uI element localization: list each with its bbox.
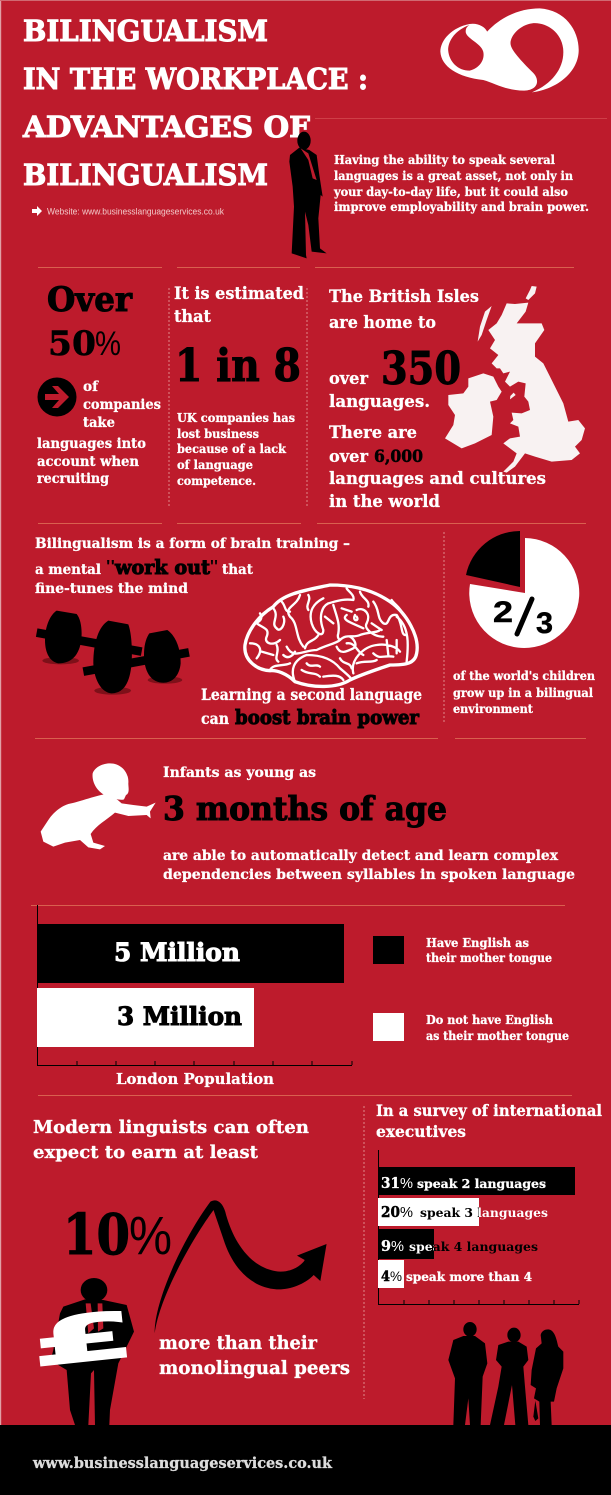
panel: brain training text: " — [106, 557, 115, 579]
chart: executives languages bars: speak 4 languages — [409, 1239, 538, 1254]
panel: British Isles text: languages and cultures — [329, 469, 546, 489]
brain power text: Learning a second language — [201, 685, 422, 704]
chart: executives languages bars: speak 3 languages — [420, 1205, 548, 1220]
panel: infants text: are able to automatically detect and learn complex — [163, 848, 559, 864]
chart: executives languages bars: % — [390, 1268, 402, 1284]
panel: infants text: 3 months of age — [163, 789, 447, 828]
panel: British Isles text: in the world — [329, 492, 440, 512]
panel: infants text: dependencies between syllables in spoken language — [163, 867, 575, 883]
brain power text: can — [201, 709, 229, 728]
title: BILINGUALISM — [23, 158, 268, 192]
children caption: of the world's children — [453, 669, 595, 683]
website link: Website: www.businesslanguageservices.co.uk — [47, 206, 224, 216]
chart: two thirds pie: 3 — [536, 607, 553, 640]
panel: over 50 percent: 50 — [48, 324, 96, 364]
chart: London population bars — [37, 905, 352, 1088]
panel: linguists earnings text: Modern linguists can often — [33, 1117, 309, 1138]
chart: executives languages bars: % — [400, 1204, 413, 1221]
panel: 1 in 8: of language — [177, 457, 253, 472]
chart: London population bars: London Population — [116, 1070, 274, 1088]
panel: 1 in 8: competence. — [177, 473, 256, 488]
title: BILINGUALISM — [23, 14, 268, 48]
title: ADVANTAGES OF — [22, 110, 310, 144]
chart: executives languages bars: speak more than 4 — [406, 1269, 532, 1284]
panel: over 50 percent: of — [83, 379, 99, 395]
panel: over 50 percent: Over — [47, 280, 133, 320]
chart: executives languages bars: 31 — [381, 1174, 400, 1192]
chart: London population bars: 3 Million — [117, 1002, 242, 1031]
more than text: more than their — [159, 1333, 317, 1354]
chart: executives languages bars — [378, 1150, 579, 1304]
icon: businessman silhouette — [289, 132, 327, 258]
legend — [373, 936, 569, 1043]
children caption: grow up in a bilingual — [453, 686, 593, 700]
panel: British Isles text: over — [329, 369, 369, 389]
children caption: environment — [453, 702, 533, 716]
panel: 1 in 8 — [174, 284, 304, 488]
icon: man holding pound sign: £ — [28, 1298, 138, 1381]
panel: over 50 percent: companies — [83, 397, 161, 413]
intro text: Having the ability to speak several — [334, 153, 555, 167]
icon: company logo swirl — [440, 8, 579, 92]
panel: 1 in 8: because of a lack — [177, 441, 286, 456]
title — [22, 14, 368, 192]
brain power text: boost brain power — [235, 705, 419, 729]
chart: executives languages bars: % — [391, 1238, 404, 1255]
panel: survey heading — [376, 1101, 602, 1141]
panel: British Isles text: The British Isles — [329, 287, 479, 307]
legend: Do not have English — [426, 1013, 553, 1027]
panel: over 50 percent — [37, 280, 161, 487]
chart: London population bars: 5 Million — [114, 938, 240, 967]
panel: 1 in 8: 1 in 8 — [175, 339, 301, 392]
chart: two thirds pie — [466, 531, 579, 648]
panel: over 50 percent: recruiting — [37, 471, 109, 487]
panel: survey heading: executives — [376, 1122, 466, 1141]
panel: linguists earnings text: expect to earn at least — [33, 1142, 259, 1163]
children caption — [453, 669, 595, 716]
more than text: monolingual peers — [159, 1358, 350, 1379]
panel: survey heading: In a survey of international — [376, 1101, 602, 1120]
panel: brain training text: that — [222, 562, 254, 578]
footer band — [0, 1425, 611, 1495]
chart: executives languages bars: 4 — [381, 1269, 390, 1285]
chart: executives languages bars: speak 2 languages — [417, 1176, 546, 1191]
legend: as their mother tongue — [426, 1029, 569, 1043]
panel: over 50 percent: % — [95, 325, 121, 363]
arrow: rising swoosh — [155, 1200, 327, 1333]
icon: brain — [245, 585, 417, 686]
panel: brain training text: work out — [114, 555, 211, 579]
panel: brain training text: Bilingualism is a form of brain training – — [35, 536, 350, 552]
panel: brain training text: " — [210, 557, 218, 579]
panel: British Isles text — [329, 287, 546, 512]
icon: man holding pound sign — [28, 1278, 138, 1425]
panel: over 50 percent: take — [83, 415, 115, 431]
intro text: your day-to-day life, but it could also — [333, 185, 568, 199]
chart: executives languages bars: 9 — [381, 1237, 391, 1255]
panel: British Isles text: languages. — [329, 392, 430, 412]
panel: British Isles text: over — [329, 447, 369, 467]
more than text — [159, 1333, 350, 1379]
intro text: improve employability and brain power. — [334, 200, 589, 214]
panel: infants text: Infants as young as — [163, 765, 316, 781]
stat: 10 percent: % — [129, 1206, 172, 1266]
chart: two thirds pie: 2 — [493, 596, 513, 629]
title: IN THE WORKPLACE : — [23, 62, 368, 96]
panel: brain training text: fine-tunes the mind — [35, 581, 188, 597]
panel: brain training text — [35, 536, 350, 597]
panel: British Isles text: 6,000 — [374, 447, 423, 467]
icon: dumbbells — [37, 611, 189, 695]
panel: British Isles text: There are — [329, 423, 417, 443]
panel: over 50 percent: account when — [37, 454, 139, 470]
legend: their mother tongue — [426, 951, 552, 965]
icon: crawling baby — [41, 763, 156, 849]
panel: 1 in 8: UK companies has — [177, 410, 295, 425]
chart: executives languages bars: 20 — [381, 1203, 400, 1221]
brain power text — [201, 685, 422, 729]
legend: Have English as — [426, 936, 529, 950]
stat: 10 percent: 10 — [63, 1202, 130, 1268]
map: British Isles — [445, 286, 585, 473]
panel: British Isles text: are home to — [329, 313, 436, 333]
chart: executives languages bars: % — [400, 1175, 413, 1192]
panel: 1 in 8: It is estimated — [174, 284, 304, 304]
panel: over 50 percent: languages into — [37, 436, 146, 452]
intro text: languages is a great asset, not only in — [334, 169, 573, 183]
icon: arrow circle — [38, 378, 76, 416]
panel: linguists earnings text — [33, 1117, 309, 1163]
panel: British Isles text: 350 — [381, 342, 461, 395]
panel: brain training text: a mental — [35, 562, 101, 578]
panel: infants text — [163, 765, 575, 883]
icon: three business people silhouettes — [448, 1322, 563, 1425]
footer band: www.businesslanguageservices.co.uk — [32, 1454, 333, 1472]
panel: 1 in 8: lost business — [177, 426, 259, 441]
panel: 1 in 8: that — [174, 307, 211, 327]
intro text — [333, 153, 589, 214]
